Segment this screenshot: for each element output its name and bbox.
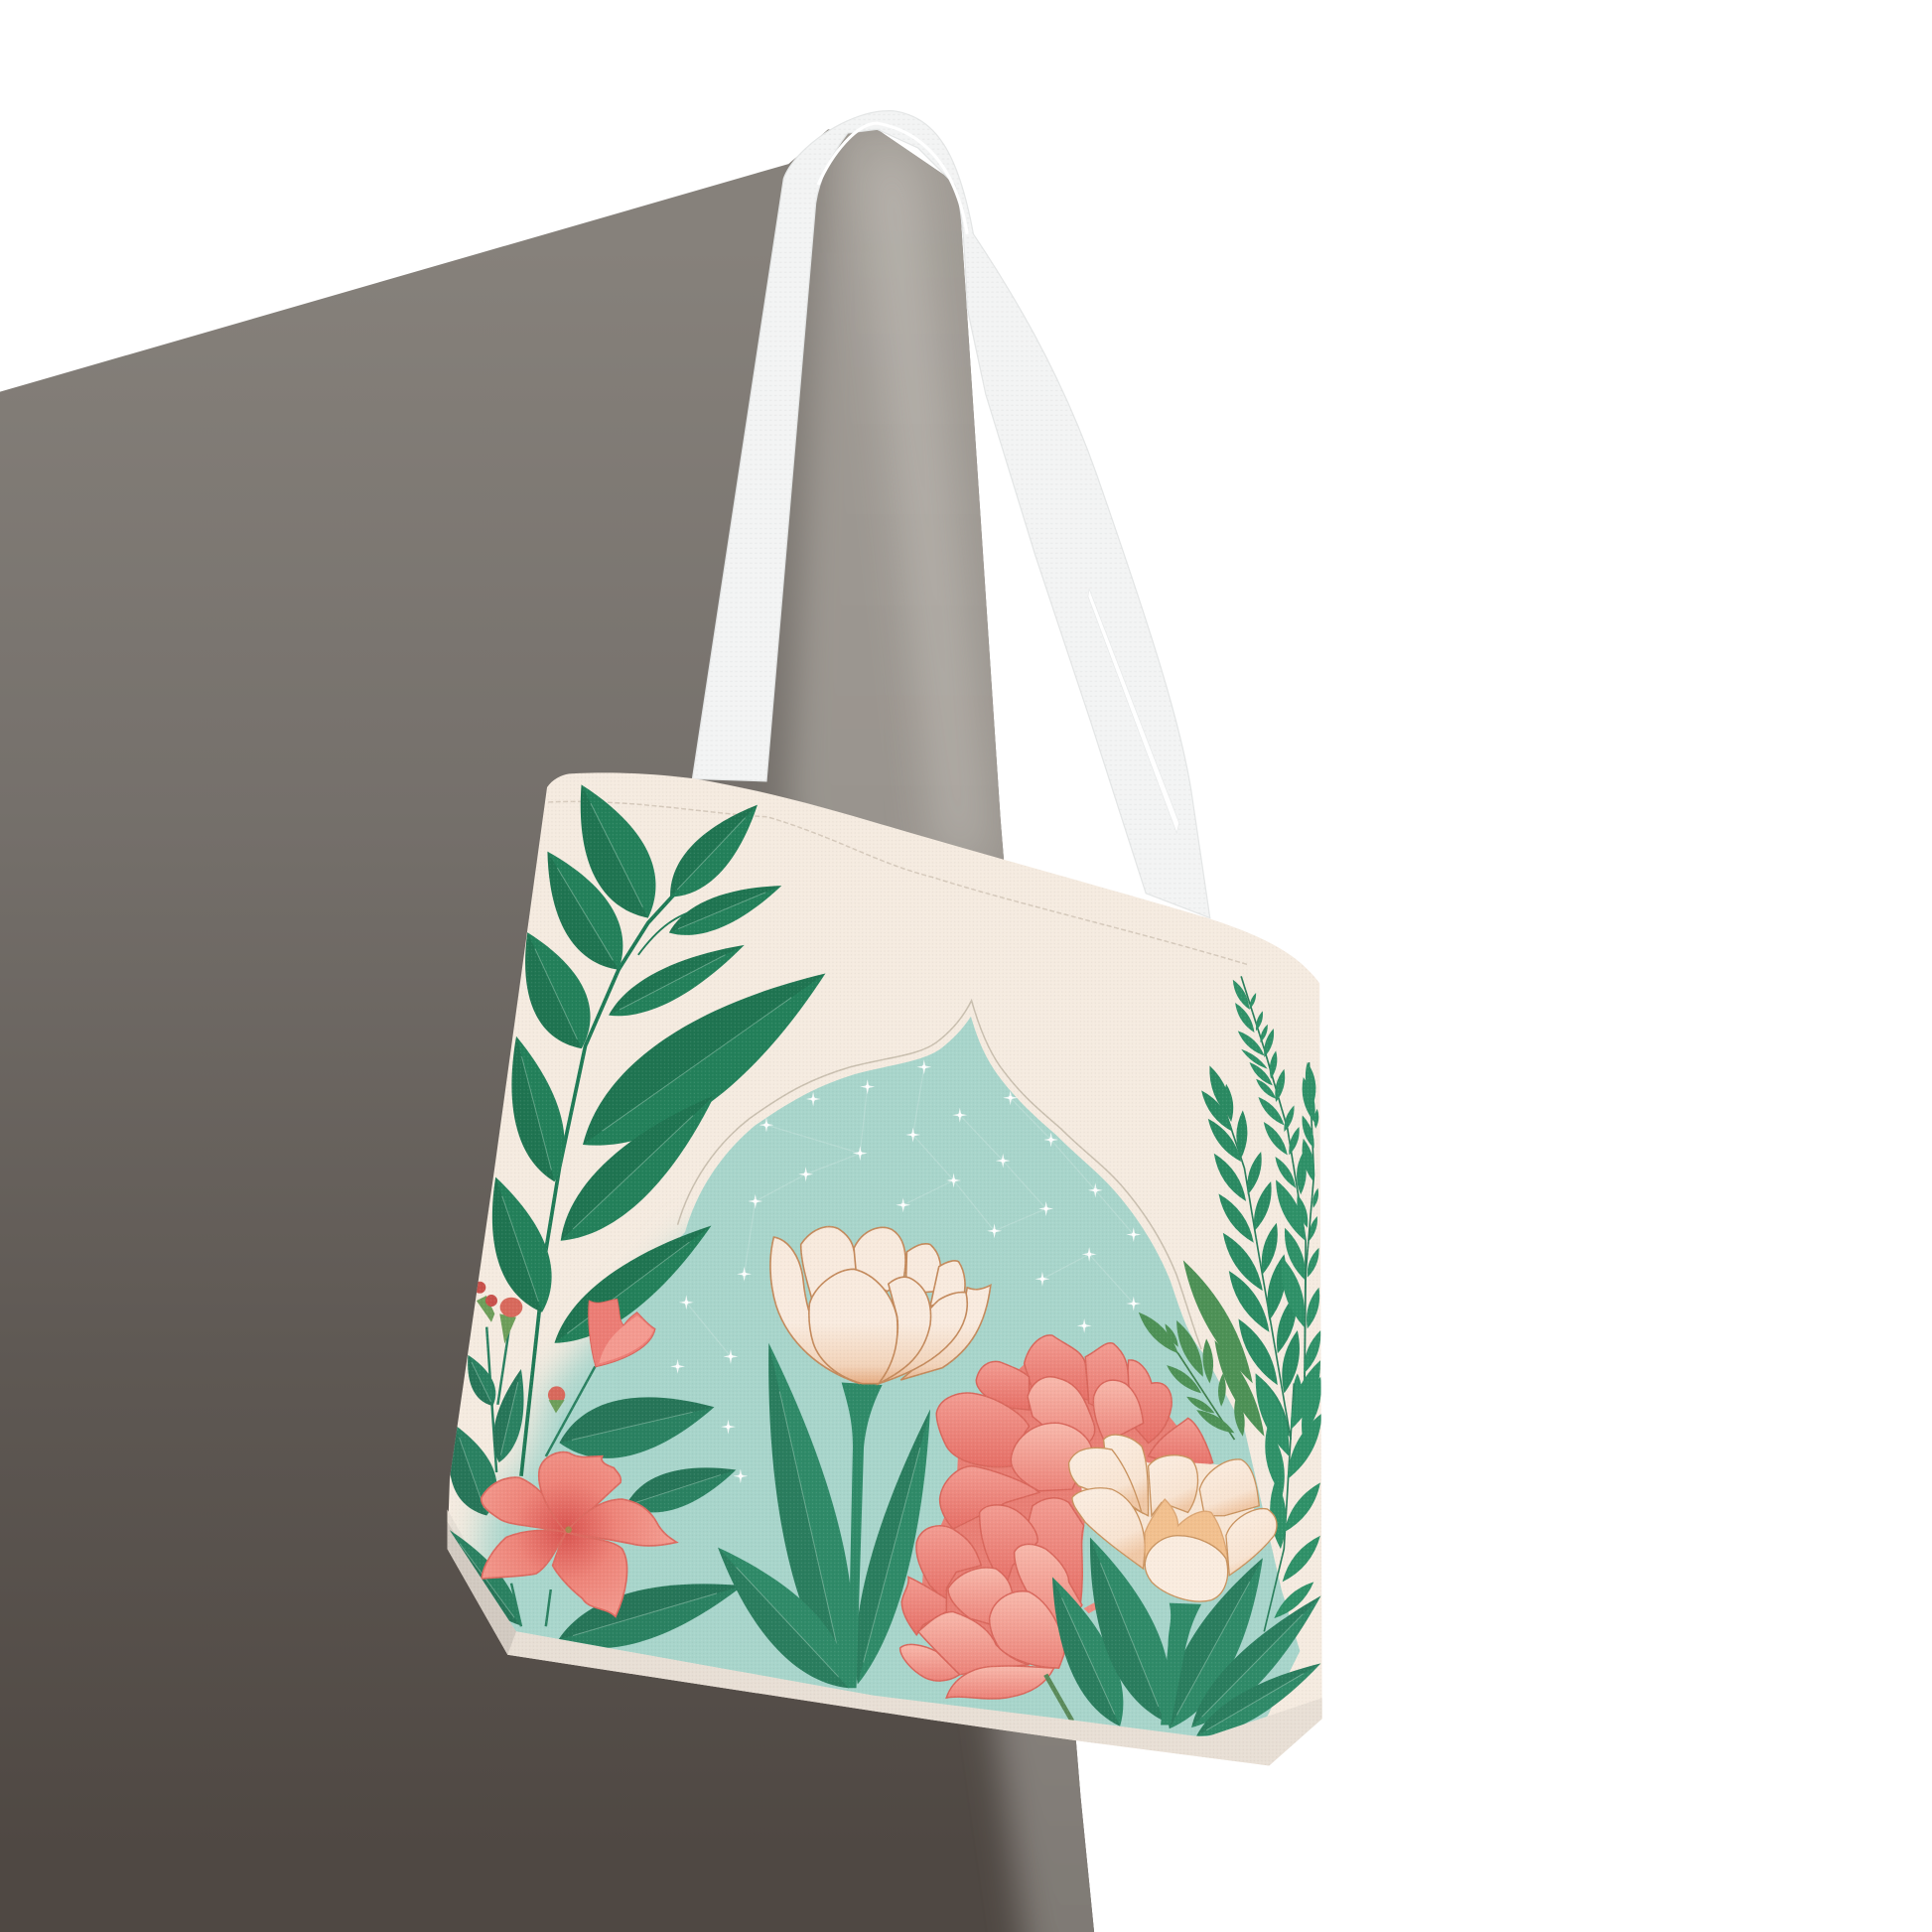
hibiscus flower <box>482 1452 677 1616</box>
strap slit between bands <box>1088 589 1179 833</box>
white tote strap <box>692 111 1210 918</box>
canvas outline <box>448 772 1322 1765</box>
sprig stems <box>486 1327 595 1626</box>
lower right leaves <box>1052 1537 1320 1736</box>
cream flower <box>1069 1435 1277 1601</box>
wall right fold shading <box>788 111 1134 1932</box>
cream flower solid base <box>1081 1461 1255 1575</box>
tote bag product illustration <box>0 110 1322 1932</box>
grey wall panel <box>0 111 1134 1932</box>
fern three <box>1293 1062 1321 1440</box>
lower fern leaflets <box>1256 1360 1322 1631</box>
flower buds <box>474 1282 565 1413</box>
printed artwork <box>434 771 1333 1748</box>
centre tulip plant <box>718 1343 930 1688</box>
small flower stem <box>1161 1603 1201 1725</box>
peony solid base <box>922 1364 1177 1675</box>
bottom hem <box>448 1509 1322 1765</box>
branch stem <box>521 894 675 1476</box>
stars on teal <box>670 1059 1141 1483</box>
right fern cluster <box>1139 976 1321 1440</box>
top stitching <box>548 801 1248 965</box>
teal arch shape <box>617 1017 1300 1737</box>
strap fold highlight <box>818 123 967 234</box>
tulip leaves <box>768 1343 850 1688</box>
pink bud flower <box>589 1299 655 1367</box>
canvas weave texture <box>448 772 1322 1765</box>
left leafy branch <box>492 784 826 1476</box>
tote bag body <box>434 771 1333 1765</box>
tulip stem and calyx <box>842 1382 883 1688</box>
lower left sprig <box>450 1281 737 1648</box>
wall left face <box>0 129 1094 1932</box>
teal left wash <box>475 1232 740 1707</box>
peony stem <box>1045 1675 1072 1721</box>
centre tulip bloom <box>770 1227 991 1384</box>
coral peony <box>900 1335 1213 1721</box>
fern two <box>1233 976 1317 1380</box>
corner fold shading <box>448 1522 516 1655</box>
arch outline <box>678 1001 1201 1349</box>
constellation lines <box>686 1067 1134 1356</box>
fern one <box>1201 1065 1300 1440</box>
olive sprig <box>1139 1260 1264 1440</box>
